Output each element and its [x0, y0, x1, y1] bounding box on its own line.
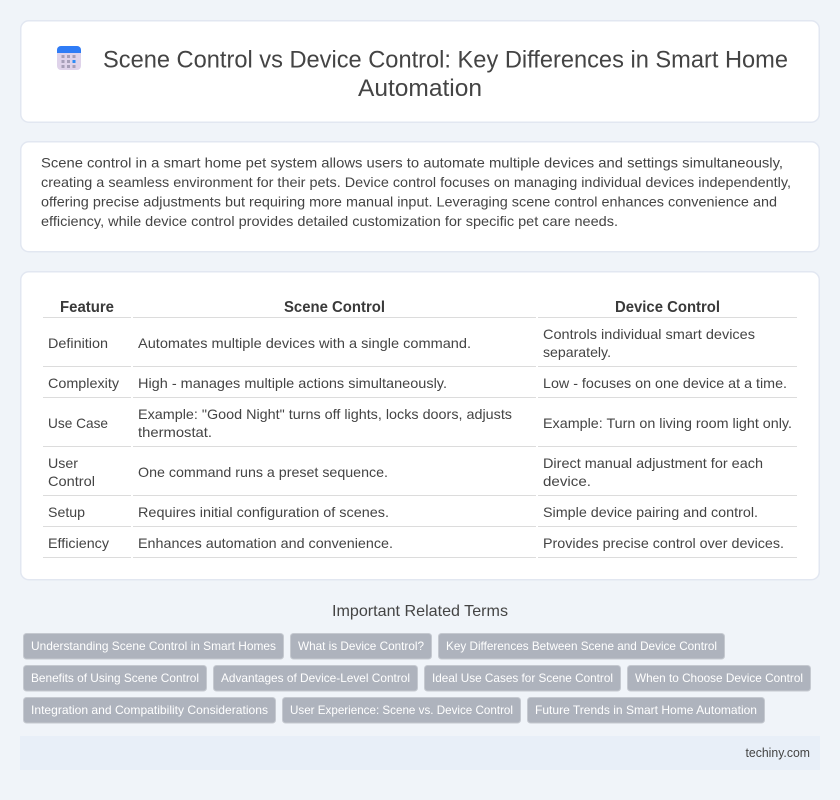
chip — [24, 634, 284, 659]
chip: Ideal Use Cases for Scene Control — [432, 671, 613, 685]
chip: Key Differences Between Scene and Device Control — [446, 639, 717, 653]
row: complexity: Low - focuses on one device at a time. — [543, 375, 787, 391]
footer — [20, 736, 820, 770]
chip: Future Trends in Smart Home Automation — [535, 703, 757, 717]
chip: What is Device Control? — [298, 639, 424, 653]
text block: introduction: efficiency, while device control provides detailed customization for specific pet care needs. — [41, 213, 618, 229]
row: user control: Control — [48, 473, 95, 489]
row: complexity — [48, 375, 787, 391]
row: efficiency: Enhances automation and convenience. — [138, 535, 393, 551]
row: definition: Controls individual smart devices — [543, 326, 755, 342]
chip: When to Choose Device Control — [635, 671, 803, 685]
row: definition: Definition — [48, 335, 108, 351]
row: definition: Automates multiple devices with a single command. — [138, 335, 471, 351]
heading: important related terms: Important Related Terms — [332, 603, 508, 620]
row: definition: separately. — [543, 344, 611, 360]
chip: Integration and Compatibility Considerations — [31, 703, 268, 717]
text block: introduction — [41, 154, 791, 229]
chip — [214, 666, 418, 691]
table header: Scene Control — [284, 299, 385, 316]
row: complexity: Complexity — [48, 375, 119, 391]
row: efficiency: Provides precise control over devices. — [543, 535, 784, 551]
chip — [290, 634, 432, 659]
table header: Device Control — [615, 299, 720, 316]
row: user control: One command runs a preset sequence. — [138, 464, 388, 480]
text block: introduction: offering precise adjustments but requiring more manual input. Leveraging scene control enhances convenience and — [41, 194, 777, 210]
row: setup: Setup — [48, 504, 85, 520]
row: definition — [48, 326, 755, 360]
chip — [282, 698, 520, 723]
row: use case: Example: "Good Night" turns off lights, locks doors, adjusts — [138, 406, 512, 422]
chip — [438, 634, 724, 659]
row: setup: Simple device pairing and control. — [543, 504, 758, 520]
footer credit: techiny.com — [746, 745, 810, 760]
chip — [24, 698, 276, 723]
chip: Benefits of Using Scene Control — [31, 671, 199, 685]
panel: header — [21, 21, 819, 122]
chip — [24, 666, 206, 691]
row: efficiency: Efficiency — [48, 535, 109, 551]
chip — [528, 698, 764, 723]
chip: Understanding Scene Control in Smart Homes — [31, 639, 276, 653]
title: Scene Control vs Device Control: Key Differences in Smart Home — [103, 46, 788, 74]
chip: User Experience: Scene vs. Device Control — [290, 703, 513, 717]
row: use case: Example: Turn on living room light only. — [543, 415, 792, 431]
row: user control — [48, 455, 763, 489]
table header — [60, 299, 720, 316]
row: setup — [48, 504, 758, 520]
row: user control: Direct manual adjustment for each — [543, 455, 763, 471]
row: user control: User — [48, 455, 78, 471]
row: use case — [48, 406, 792, 440]
table header: Feature — [60, 299, 114, 316]
row: use case: Use Case — [48, 415, 108, 431]
title: Automation — [358, 75, 482, 102]
panel: introduction — [21, 142, 819, 252]
row: setup: Requires initial configuration of scenes. — [138, 504, 389, 520]
text block: introduction: Scene control in a smart home pet system allows users to automate multiple devices and settings simultaneously, — [41, 154, 783, 170]
title — [103, 46, 788, 102]
icon: calendar — [57, 46, 81, 70]
row: complexity: High - manages multiple actions simultaneously. — [138, 375, 447, 391]
chip — [424, 666, 620, 691]
panel: comparison table — [21, 272, 819, 580]
chip — [628, 666, 810, 691]
text block: introduction: creating a seamless environment for their pets. Device control focuses on managing individual devices independently, — [41, 174, 791, 190]
row: efficiency — [48, 535, 784, 551]
related terms chips — [24, 634, 810, 723]
row: user control: device. — [543, 473, 591, 489]
row: use case: thermostat. — [138, 424, 212, 440]
chip: Advantages of Device-Level Control — [221, 671, 410, 685]
